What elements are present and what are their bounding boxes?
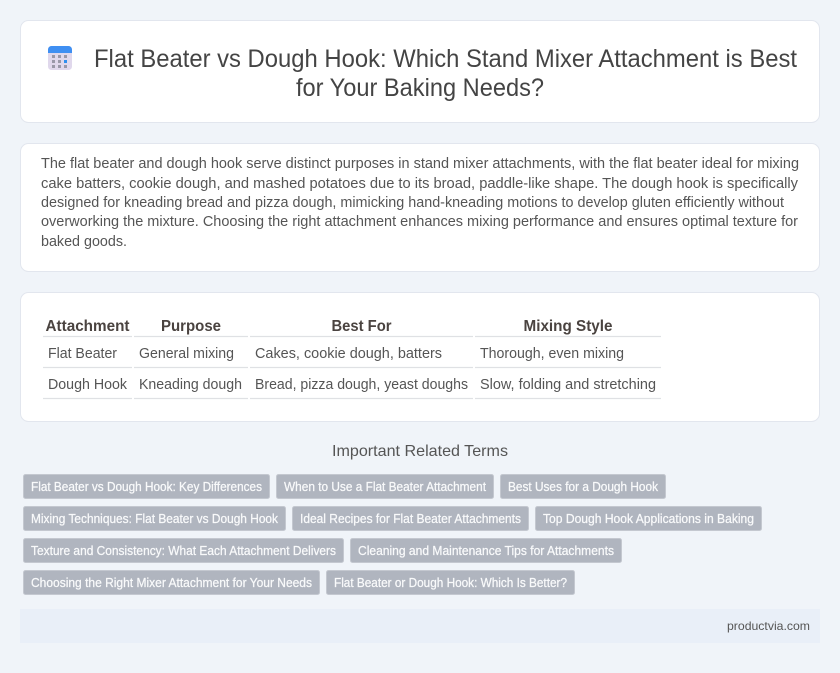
table header: Purpose <box>161 318 221 335</box>
tag: Best Uses for a Dough Hook <box>508 480 659 494</box>
icon: calendar <box>48 46 72 70</box>
panel: title header <box>20 20 820 122</box>
table row: dough hook: Kneading dough <box>139 377 242 393</box>
table row: flat beater: Flat Beater <box>48 346 117 362</box>
tag <box>24 506 286 530</box>
tag: Flat Beater or Dough Hook: Which Is Better? <box>334 576 567 590</box>
footer <box>20 609 820 643</box>
tag <box>292 506 528 530</box>
table row: flat beater: Thorough, even mixing <box>480 346 624 362</box>
tag <box>24 474 270 498</box>
tag <box>500 474 666 498</box>
tag: Mixing Techniques: Flat Beater vs Dough Hook <box>31 512 279 526</box>
table header: Best For <box>332 318 392 335</box>
tag: Texture and Consistency: What Each Attachment Delivers <box>31 544 336 558</box>
text block: description paragraph: baked goods. <box>41 234 127 250</box>
tag: Flat Beater vs Dough Hook: Key Differences <box>31 480 262 494</box>
title: Flat Beater vs Dough Hook: Which Stand Mixer Attachment is Best <box>94 45 797 73</box>
panel: comparison table <box>20 292 820 422</box>
tag: Ideal Recipes for Flat Beater Attachments <box>300 512 521 526</box>
text block: description paragraph: cake batters, cookie dough, and mashed potatoes due to its broad, paddle-like shape. The dough hook is specifically <box>41 176 799 192</box>
footer source text: productvia.com <box>727 619 810 633</box>
table row: dough hook <box>48 377 656 393</box>
table row: flat beater: Cakes, cookie dough, batters <box>255 346 442 362</box>
tag <box>24 570 320 594</box>
tag: Cleaning and Maintenance Tips for Attachments <box>358 544 614 558</box>
tag <box>276 474 494 498</box>
tag <box>326 570 574 594</box>
text block: description paragraph: overworking the mixture. Choosing the right attachment enhances mixing performance and ensures optimal texture for <box>41 214 798 230</box>
table header <box>46 318 613 335</box>
text block: description paragraph <box>41 156 799 250</box>
tag <box>24 538 344 562</box>
table row: flat beater <box>48 346 624 362</box>
tags: related terms <box>24 474 762 594</box>
table row: flat beater: General mixing <box>139 346 234 362</box>
table row: dough hook: Slow, folding and stretching <box>480 377 656 393</box>
tag: Choosing the Right Mixer Attachment for Your Needs <box>31 576 312 590</box>
title <box>94 45 797 102</box>
heading: important related terms: Important Related Terms <box>332 443 508 460</box>
text block: description paragraph: The flat beater and dough hook serve distinct purposes in stand mixer attachments, with the flat beater ideal for mixing <box>41 156 799 172</box>
table row: dough hook: Dough Hook <box>48 377 128 393</box>
tag: When to Use a Flat Beater Attachment <box>284 480 486 494</box>
text block: description paragraph: designed for kneading bread and pizza dough, mimicking hand-kneading motions to develop gluten efficiently without <box>41 195 784 211</box>
title: for Your Baking Needs? <box>296 74 544 102</box>
panel: description <box>20 144 820 272</box>
tag <box>350 538 622 562</box>
table row: dough hook: Bread, pizza dough, yeast doughs <box>255 377 468 393</box>
tag: Top Dough Hook Applications in Baking <box>543 512 754 526</box>
table header: Attachment <box>46 318 130 335</box>
table header: Mixing Style <box>524 318 613 335</box>
tag <box>536 506 762 530</box>
